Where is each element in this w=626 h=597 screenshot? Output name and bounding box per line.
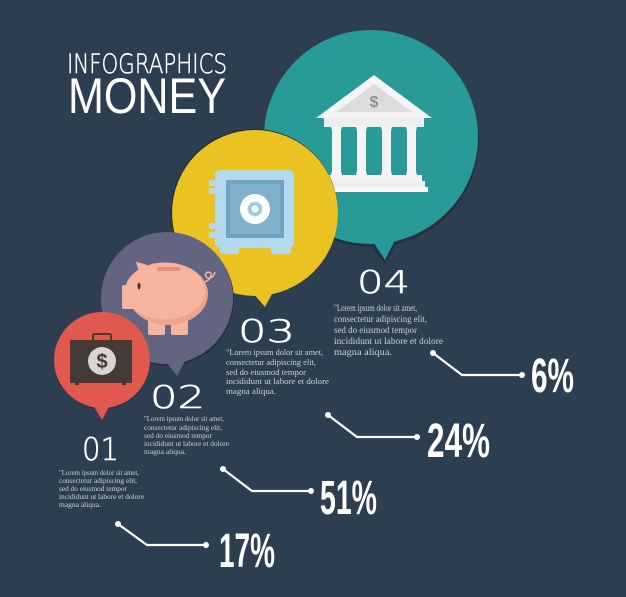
connector: 24% bbox=[325, 412, 420, 440]
icon: bank bbox=[316, 75, 432, 192]
text block: 04: "Lorem ipsum dolor sit amet, bbox=[334, 303, 417, 313]
percentage: 24%: 24% bbox=[427, 415, 490, 468]
text block: 04: sed do eiusmod tempor bbox=[334, 325, 417, 335]
icon: piggy bank bbox=[122, 262, 215, 335]
number: 01: 01 bbox=[82, 432, 119, 468]
text block: 01: magna aliqua. bbox=[59, 500, 101, 509]
text block: 02: incididunt ut labore et dolore bbox=[144, 439, 230, 448]
connector: 51% bbox=[220, 466, 314, 494]
text block: 03: consectetur adipiscing elit, bbox=[226, 357, 316, 367]
panel: 02 purple bubble bbox=[101, 232, 234, 376]
text block: 02: consectetur adipiscing elit, bbox=[144, 423, 222, 432]
text block: 04: magna aliqua. bbox=[334, 347, 392, 357]
title: INFOGRAPHICS bbox=[67, 49, 227, 80]
title bbox=[67, 49, 227, 124]
panel: 03 yellow bubble bbox=[171, 129, 338, 307]
icon: safe bbox=[209, 170, 294, 254]
icon: briefcase bbox=[70, 334, 132, 385]
text block: 04: incididunt ut labore et dolore bbox=[334, 336, 443, 346]
number: 02: 02 bbox=[150, 380, 205, 416]
text block: 03 bbox=[226, 347, 329, 396]
text block: 02: magna aliqua. bbox=[144, 447, 186, 456]
text block: 03: "Lorem ipsum dolor sit amet, bbox=[226, 347, 323, 357]
text block: 03: incididunt ut labore et dolore bbox=[226, 376, 329, 386]
panel: 04 teal bubble bbox=[264, 30, 479, 264]
text block: 01: incididunt ut labore et dolore bbox=[59, 492, 145, 501]
number: 03: 03 bbox=[238, 314, 295, 350]
number: 04: 04 bbox=[357, 265, 410, 301]
percentage: 51%: 51% bbox=[320, 472, 377, 525]
text block: 04 bbox=[334, 303, 443, 357]
icon: bank: $ bbox=[370, 94, 379, 111]
text block: 03: magna aliqua. bbox=[226, 386, 276, 396]
text block: 01: consectetur adipiscing elit, bbox=[59, 476, 137, 485]
panel: 01 red bubble bbox=[54, 312, 150, 420]
text block: 02: "Lorem ipsum dolor sit amet, bbox=[144, 414, 224, 423]
text block: 01 bbox=[59, 468, 145, 509]
text block: 04: consectetur adipiscing elit, bbox=[334, 314, 427, 324]
text block: 02 bbox=[144, 414, 230, 456]
title: MONEY bbox=[68, 68, 226, 124]
connector: 6% bbox=[430, 350, 525, 378]
text block: 02: sed do eiusmod tempor bbox=[144, 431, 212, 440]
text block: 03: sed do eiusmod tempor bbox=[226, 367, 306, 377]
percentage: 6%: 6% bbox=[531, 350, 574, 403]
icon: briefcase: $ bbox=[96, 351, 108, 373]
text block: 01: sed do eiusmod tempor bbox=[59, 484, 127, 493]
percentage: 17%: 17% bbox=[219, 525, 275, 578]
connector: 17% bbox=[115, 521, 209, 548]
text block: 01: "Lorem ipsum dolor sit amet, bbox=[59, 468, 139, 477]
